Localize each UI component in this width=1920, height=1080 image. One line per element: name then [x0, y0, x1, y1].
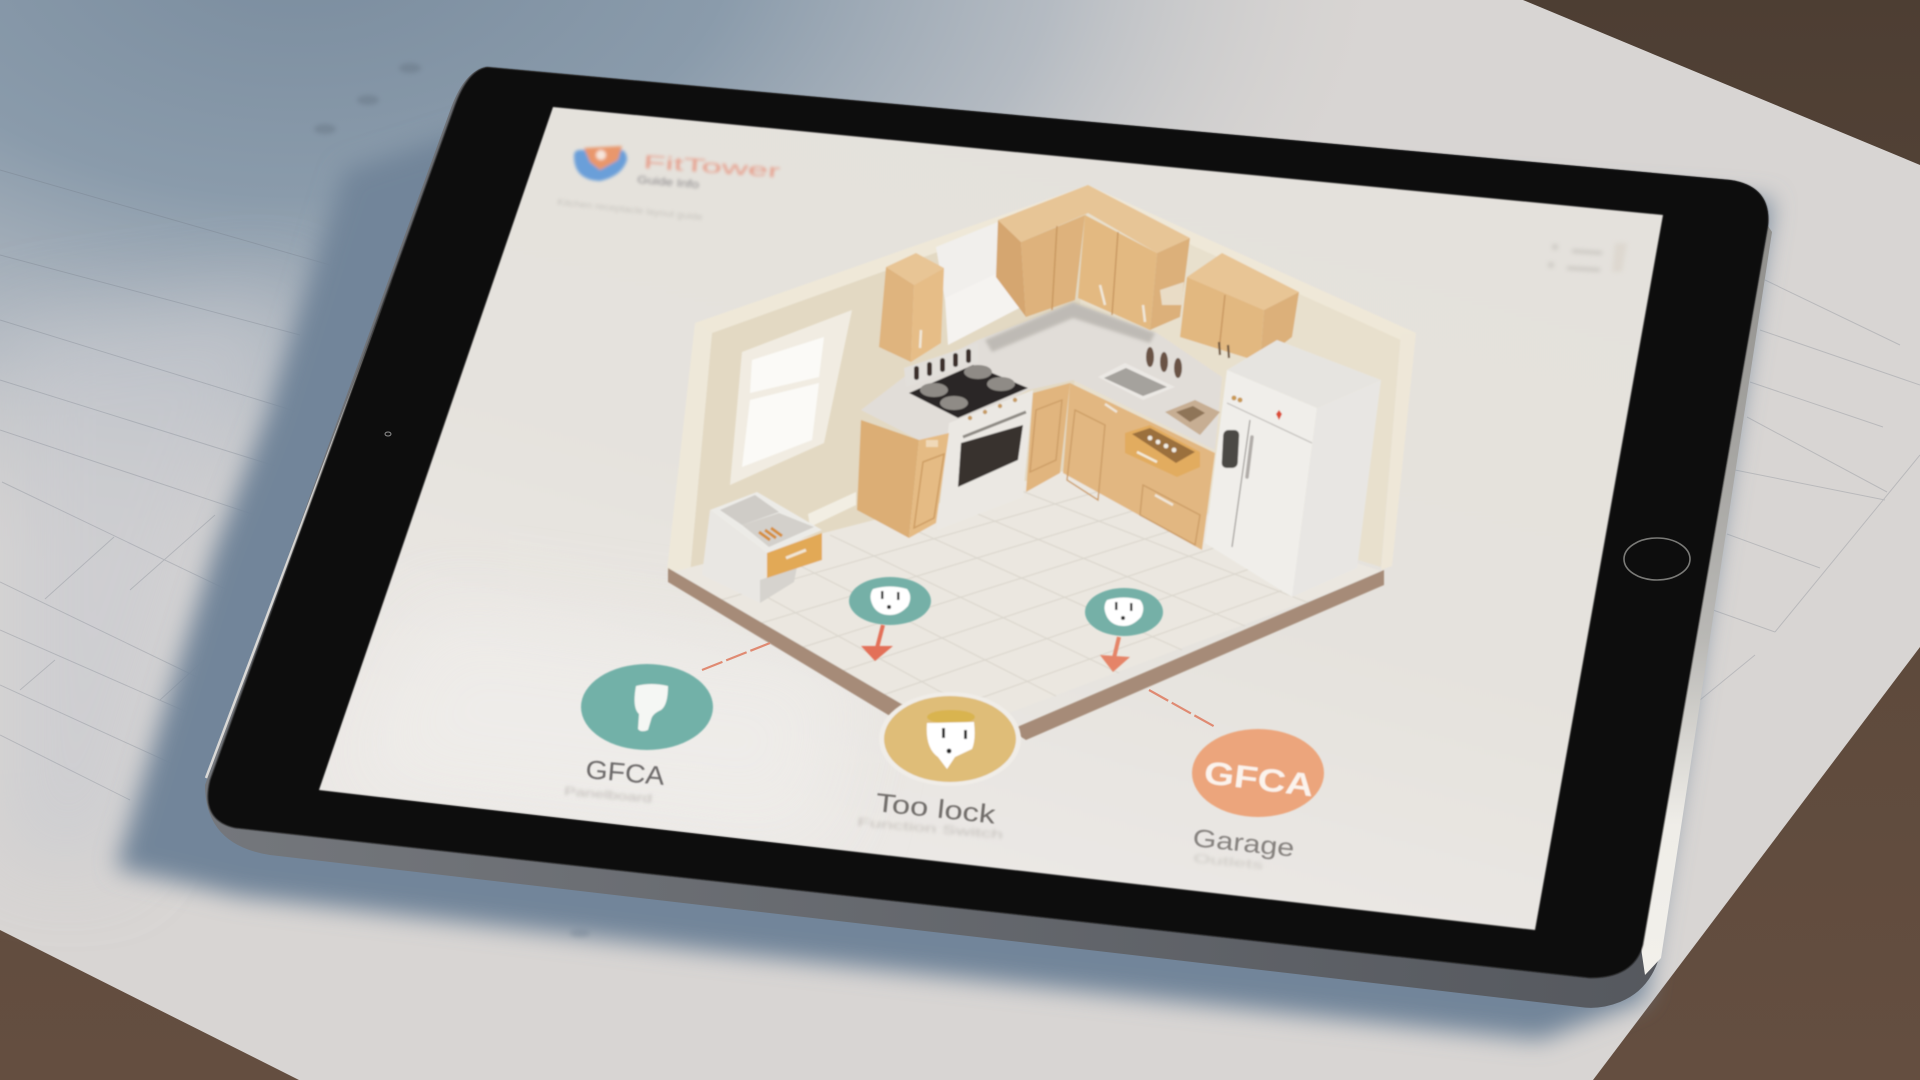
tablet: [205, 67, 1772, 1008]
yellow circle with white ring: [879, 692, 1021, 786]
app header: [557, 146, 781, 222]
tablet cast shadow: [116, 120, 1772, 1040]
orange circle: [1192, 729, 1324, 817]
dashed leader to right callout: [1149, 690, 1217, 728]
oven: [937, 390, 1033, 530]
range hood: [936, 222, 1025, 345]
upper left cabinet: [879, 253, 944, 362]
sublabel: Function Switch: [857, 815, 1003, 842]
tiled floor: [672, 470, 1384, 735]
app subtitle: Guide Info: [637, 174, 700, 191]
label GFCA: GFCA: [584, 754, 666, 791]
white drawer unit: [702, 492, 822, 603]
sink: [1098, 363, 1175, 400]
lower corner cabinet: [1026, 383, 1215, 550]
sublabel: Outlets: [1193, 851, 1264, 872]
legend: [1548, 243, 1627, 272]
dashed leader to left callout: [702, 643, 770, 670]
sunlit patch on paper: [0, 290, 300, 868]
teal circle: [581, 664, 713, 750]
app name: FitTower: [643, 152, 781, 182]
bright right side edge: [1641, 226, 1772, 975]
header caption: Kitchen receptacle layout guide: [557, 197, 703, 222]
counter top: [861, 303, 1222, 450]
soft lighter patch on screen: [340, 600, 860, 850]
utensils on counter: [1146, 347, 1182, 378]
tablet bezel: [208, 67, 1768, 978]
tablet screen: [319, 107, 1663, 930]
front camera: [385, 432, 391, 436]
tablet metal body: [205, 67, 1768, 1008]
callout: tool lock yellow: [857, 692, 1021, 842]
red arrow right: [1100, 637, 1130, 672]
right wall end: [1381, 333, 1416, 570]
kitchen isometric illustration: [667, 185, 1416, 740]
small outlet marker right: [1085, 588, 1163, 636]
wall skirting: [808, 492, 856, 527]
icon: plug: [635, 684, 668, 731]
upper corner cabinets: [996, 185, 1190, 330]
small outlet marker left: [849, 577, 931, 625]
GFCA in circle: GFCA: [1202, 754, 1316, 803]
refrigerator: [1205, 340, 1381, 597]
right baseboard trim: [1010, 570, 1384, 740]
wall top cap: [695, 185, 1416, 340]
cooktop: [909, 365, 1028, 418]
sublabel: Panelboard: [564, 784, 653, 806]
red arrow left: [861, 625, 893, 661]
callout: garage orange: [1191, 729, 1324, 872]
outlet plug icon: [1104, 598, 1143, 626]
open cabinet drawer: [1125, 425, 1200, 477]
left wall end: [667, 323, 712, 573]
callout: GFCA teal: [564, 664, 713, 806]
upper right cabinet: [1180, 253, 1299, 362]
label Too lock: Too lock: [874, 787, 998, 830]
right wall: [1068, 198, 1401, 567]
left baseboard trim: [668, 568, 905, 716]
bright left side edge: [206, 282, 393, 778]
left wall: [690, 198, 1088, 573]
lower left cabinet: [857, 420, 949, 538]
under-cabinet shadow: [985, 302, 1155, 352]
window: [730, 310, 852, 485]
home button: [1624, 538, 1690, 580]
icon: outlet: [927, 710, 975, 769]
stove backguard: [904, 343, 978, 387]
label Garage: Garage: [1191, 824, 1296, 863]
app logo: [574, 146, 627, 181]
outlet plug icon: [870, 586, 910, 615]
tray: [1165, 400, 1220, 435]
